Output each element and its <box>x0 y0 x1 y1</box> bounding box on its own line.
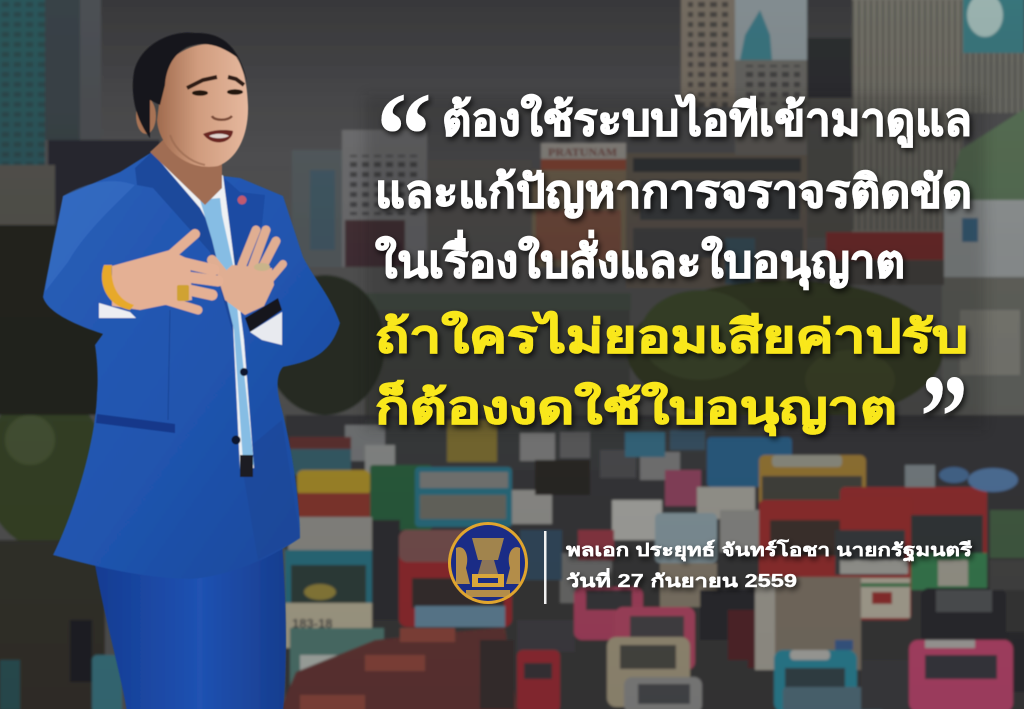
speaker name and title: พลเอก ประยุทธ์ จันทร์โอชา นายกรัฐมนตรี <box>566 539 972 562</box>
quote line 2: และแก้ปัญหาการจราจรติดขัด <box>375 166 972 218</box>
right hand with watch <box>212 230 283 345</box>
background: traffic vehicles: 183-18 <box>292 616 332 631</box>
trousers <box>95 480 286 709</box>
attribution <box>566 539 972 591</box>
date: วันที่ 27 กันยายน 2559 <box>566 568 797 591</box>
prime minister figure <box>43 33 340 709</box>
vertical divider <box>544 531 546 604</box>
lapel pin and buttons <box>232 196 248 444</box>
background: city buildings: PRATUNAM <box>548 145 617 159</box>
opening quotation mark: “ <box>376 68 432 203</box>
jacket <box>43 152 340 579</box>
closing quotation mark: ” <box>920 350 968 485</box>
quote line 1: ต้องใช้ระบบไอทีเข้ามาดูแล <box>442 93 972 148</box>
head <box>133 33 248 167</box>
background: traffic vehicles <box>92 420 1024 709</box>
background: trees <box>0 225 943 709</box>
quote text <box>375 93 972 436</box>
quote line 5 highlighted: ก็ต้องงดใช้ใบอนุญาต <box>375 380 897 436</box>
emblem: government seal <box>448 522 528 604</box>
quote line 3: ในเรื่องใบสั่งและใบอนุญาต <box>375 230 905 290</box>
text shade behind quotation <box>365 95 985 430</box>
background: road <box>285 415 1024 709</box>
left hand with ring and yellow wristband <box>99 234 218 318</box>
quote line 4 highlighted: ถ้าใครไม่ยอมเสียค่าปรับ <box>375 310 968 362</box>
shirt and tie <box>152 152 254 477</box>
neck <box>150 140 222 205</box>
jacket lapel and pocket <box>96 152 300 560</box>
background: city buildings <box>0 0 1024 422</box>
